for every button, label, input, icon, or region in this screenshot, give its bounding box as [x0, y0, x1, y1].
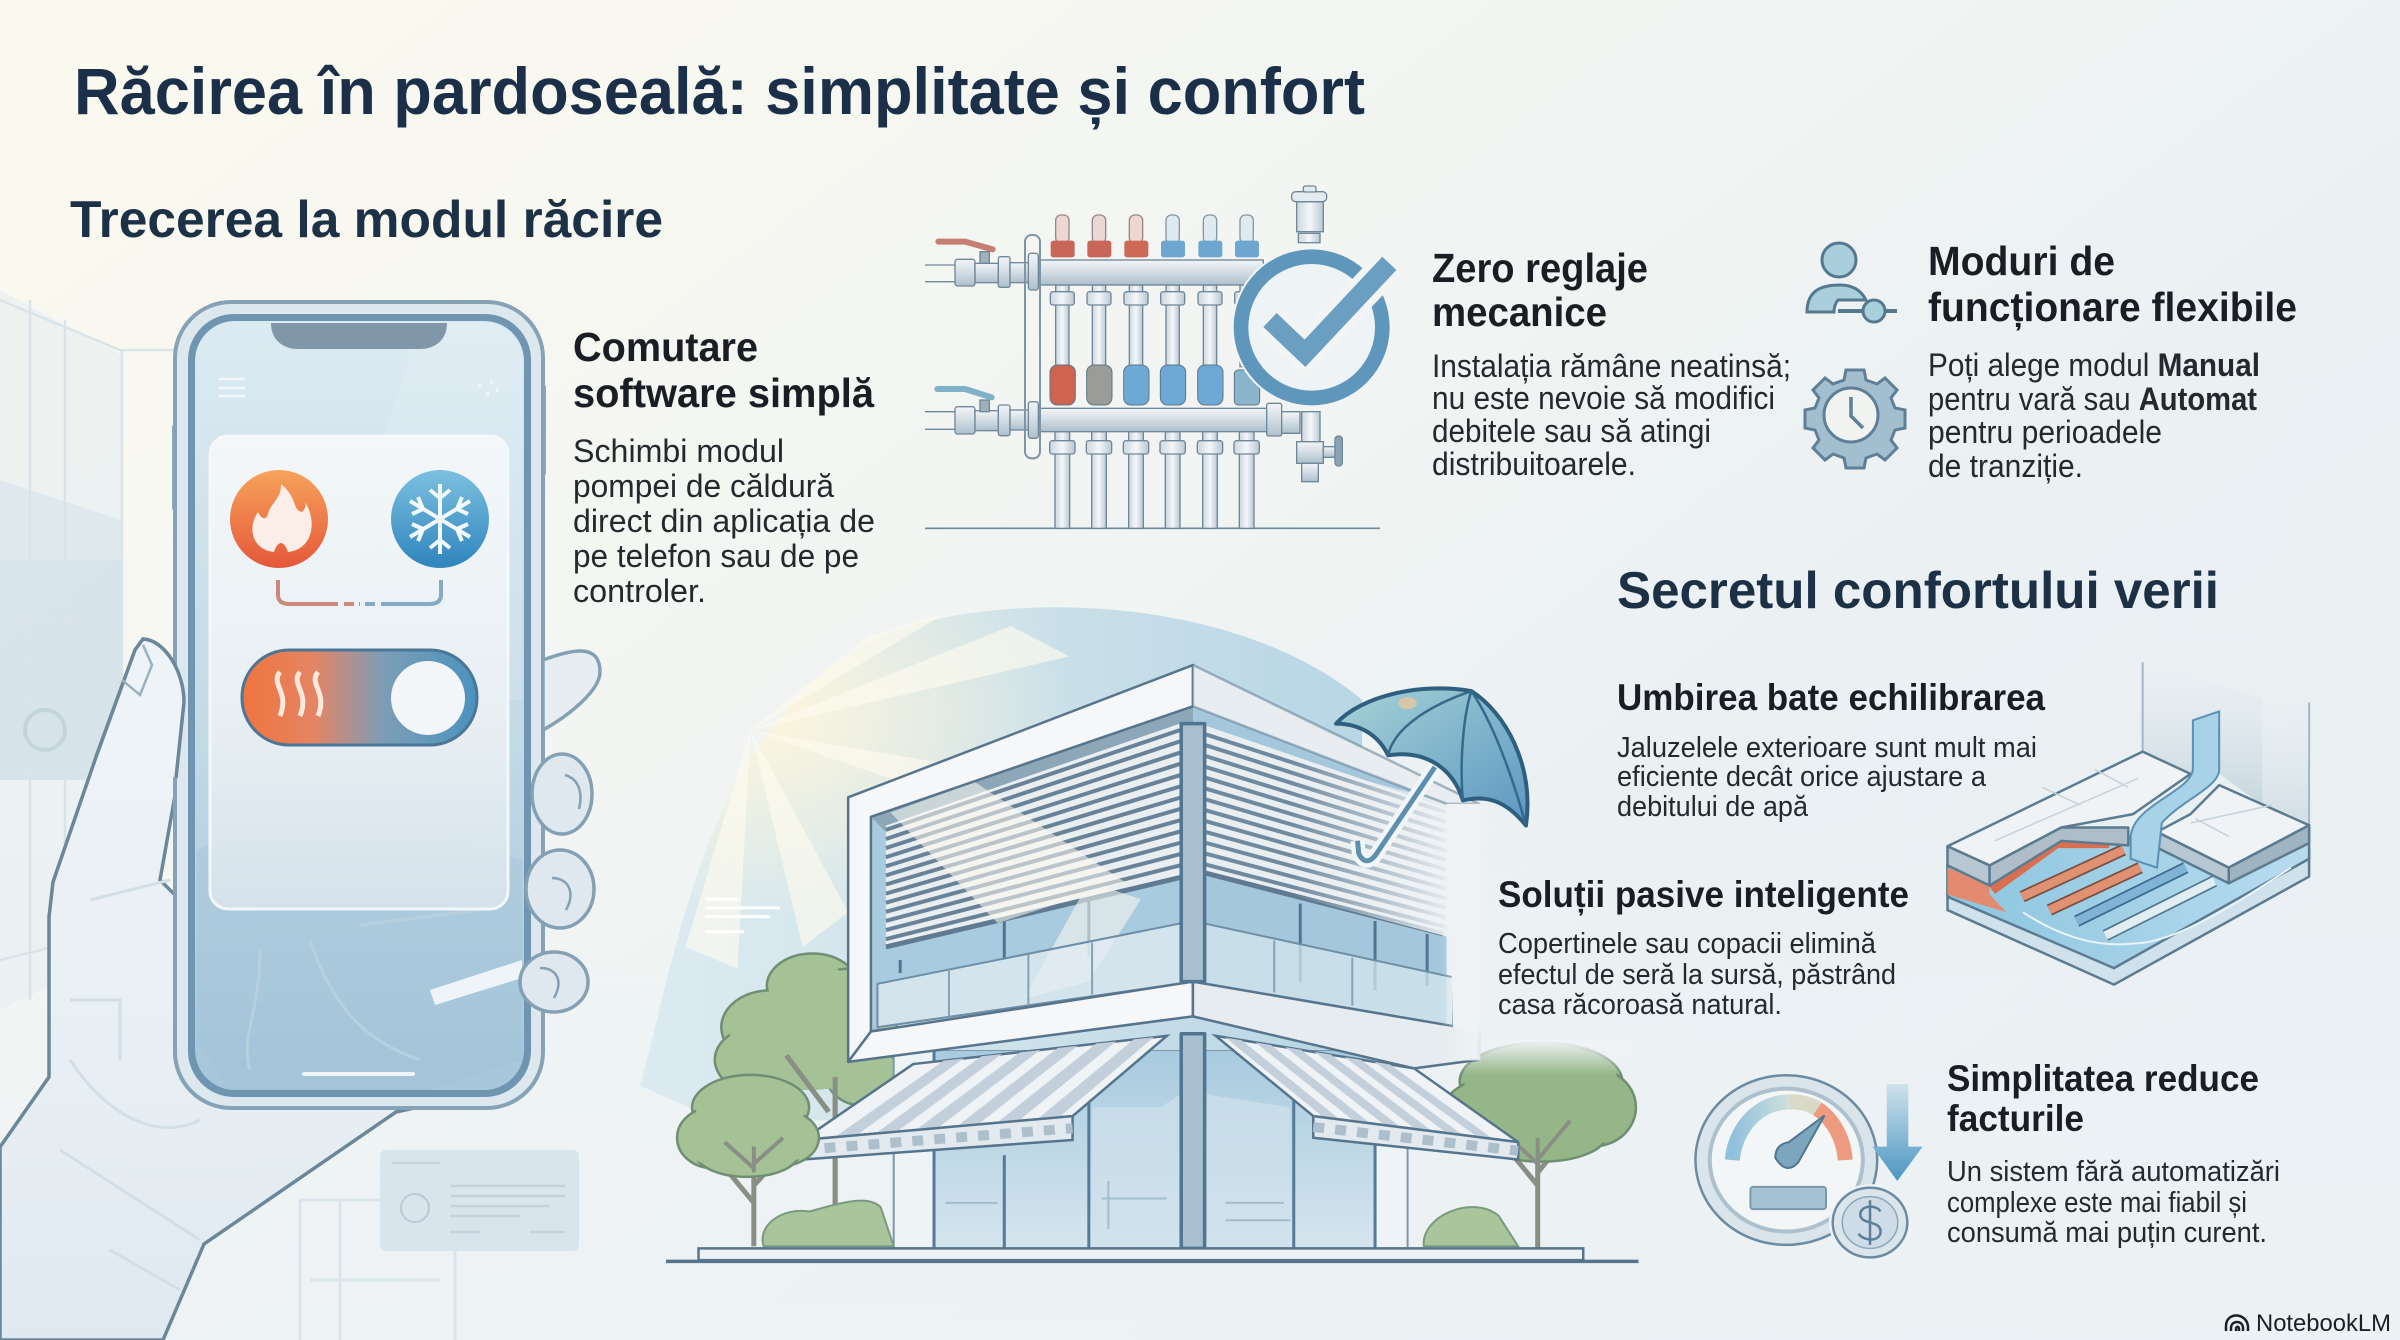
text block: solutii pasive inteligente: casa răcoroasă natural.	[1498, 989, 1782, 1021]
air vent	[1292, 186, 1327, 243]
blinds left	[871, 706, 1193, 947]
connector between icons	[278, 580, 360, 604]
icon: heating flame	[230, 470, 328, 568]
text block: zero reglaje mecanice: Instalația rămâne neatinsă;	[1432, 348, 1791, 384]
text block: moduri de functionare flexibile: Poți alege modul Manual	[1928, 347, 2260, 383]
toggle switch	[242, 650, 477, 745]
text block: solutii pasive inteligente	[1498, 874, 1909, 1021]
wall	[2143, 662, 2309, 825]
dots icon	[478, 382, 499, 394]
text block: comutare software simpla	[573, 324, 875, 609]
trees front	[677, 1075, 1518, 1246]
blinds right	[1206, 726, 1453, 938]
text block: umbrirea bate echilibrarea: Jaluzelele exterioare sunt mult mai	[1617, 732, 2037, 764]
phone body	[172, 302, 546, 1108]
sunbeam overlay	[890, 782, 1141, 999]
text block: zero reglaje mecanice	[1432, 245, 1791, 482]
brand mark: notebooklm: NotebookLM	[2256, 1310, 2391, 1337]
text block: comutare software simpla: Schimbi modul	[573, 433, 784, 469]
text block: zero reglaje mecanice: Zero reglaje	[1432, 245, 1648, 291]
icon: gear with clock	[1805, 370, 1905, 468]
text block: moduri de functionare flexibile: pentru perioadele	[1928, 414, 2162, 450]
glass card with mode controls	[210, 436, 508, 909]
menu icon	[218, 379, 245, 396]
heading: secretul confortului verii: Secretul confortului verii	[1617, 562, 2219, 620]
icon: cooling snowflake	[391, 470, 489, 568]
text block: comutare software simpla: Comutare	[573, 324, 758, 370]
text block: zero reglaje mecanice: nu este nevoie să modifici	[1432, 380, 1775, 416]
awning right	[1216, 1036, 1518, 1159]
text block: moduri de functionare flexibile	[1928, 238, 2297, 484]
illustration: hand holding phone	[0, 302, 600, 1340]
illustration: manifold with check badge	[925, 186, 1392, 528]
floor tiles	[1948, 752, 2309, 886]
text block: comutare software simpla: software simplă	[573, 370, 875, 416]
text block: umbrirea bate echilibrarea: Umbirea bate echilibrarea	[1617, 677, 2045, 718]
illustration: underfloor cooling section	[1948, 662, 2309, 985]
down arrow	[1872, 1084, 1923, 1181]
flow meters	[1051, 215, 1259, 257]
text block: moduri de functionare flexibile: funcționare flexibile	[1928, 284, 2297, 330]
awning left	[803, 1036, 1167, 1159]
heading: trecerea la modul racire: Trecerea la modul răcire	[70, 191, 663, 249]
text block: simplitatea reduce facturile: consumă mai puțin curent.	[1947, 1217, 2267, 1249]
floor line	[925, 526, 1380, 531]
bracket	[1025, 235, 1040, 458]
illustration: shaded building	[640, 607, 1639, 1261]
check badge	[1232, 247, 1392, 407]
building frame	[848, 665, 1479, 1248]
gauge dial	[1695, 1075, 1877, 1245]
text block: zero reglaje mecanice: mecanice	[1432, 289, 1607, 335]
text block: comutare software simpla: pe telefon sau de pe	[573, 538, 859, 574]
text block: umbrirea bate echilibrarea: eficiente decât orice ajustare a	[1617, 761, 1986, 793]
heating and cooling pipes	[1992, 843, 2291, 944]
water flow	[2131, 711, 2219, 868]
text block: simplitatea reduce facturile: Simplitatea reduce	[1947, 1058, 2259, 1099]
text block: comutare software simpla: direct din aplicația de	[573, 503, 875, 539]
base and ground line	[666, 1248, 1639, 1261]
icon: gauge with falling bill	[1695, 1075, 1923, 1261]
text block: solutii pasive inteligente: Copertinele sau copacii elimină	[1498, 928, 1876, 960]
title: Răcirea în pardoseală: simplitate și confort	[74, 54, 1365, 130]
text block: umbrirea bate echilibrarea: debitului de apă	[1617, 791, 1808, 823]
text block: simplitatea reduce facturile: complexe este mai fiabil și	[1947, 1187, 2247, 1219]
hand palm	[0, 639, 450, 1340]
manifold columns	[1050, 285, 1259, 528]
text block: comutare software simpla: pompei de căldură	[573, 468, 834, 504]
text block: solutii pasive inteligente: Soluții pasive inteligente	[1498, 874, 1909, 916]
text block: moduri de functionare flexibile: pentru vară sau Automat	[1928, 381, 2257, 417]
text block: moduri de functionare flexibile: de tranziție.	[1928, 448, 2083, 484]
text block: moduri de functionare flexibile: Moduri de	[1928, 238, 2115, 284]
text block: solutii pasive inteligente: efectul de seră la sursă, păstrând	[1498, 959, 1896, 991]
notch	[271, 323, 447, 349]
ground floor glass	[894, 1051, 1408, 1248]
text block: simplitatea reduce facturile: Un sistem fără automatizări	[1947, 1156, 2280, 1188]
text block: simplitatea reduce facturile: facturile	[1947, 1098, 2084, 1139]
actuators	[1050, 365, 1260, 405]
icon: person with slider	[1807, 243, 1897, 322]
home indicator	[302, 1072, 415, 1076]
text block: comutare software simpla: controler.	[573, 573, 706, 609]
trees behind	[715, 953, 1636, 1251]
dollar coin	[1829, 1184, 1911, 1261]
icon: umbrella	[1336, 688, 1527, 861]
phone screen	[195, 321, 524, 1090]
thumb	[96, 639, 184, 778]
sky dome with sun	[640, 607, 1362, 1120]
text block: zero reglaje mecanice: debitele sau să atingi	[1432, 413, 1711, 449]
upper floor windows	[871, 706, 1447, 1029]
text block: simplitatea reduce facturile	[1947, 1058, 2280, 1249]
supply bar and valve	[925, 242, 1263, 290]
return bar and valve	[925, 389, 1342, 482]
fingers	[520, 651, 600, 1012]
base slab	[1948, 827, 2309, 985]
text block: umbrirea bate echilibrarea	[1617, 677, 2045, 823]
text block: zero reglaje mecanice: distribuitoarele.	[1432, 446, 1636, 482]
ghost building background pattern	[0, 290, 579, 1340]
balcony glass rail	[877, 921, 1453, 1027]
right edge fade	[1440, 804, 1480, 1061]
